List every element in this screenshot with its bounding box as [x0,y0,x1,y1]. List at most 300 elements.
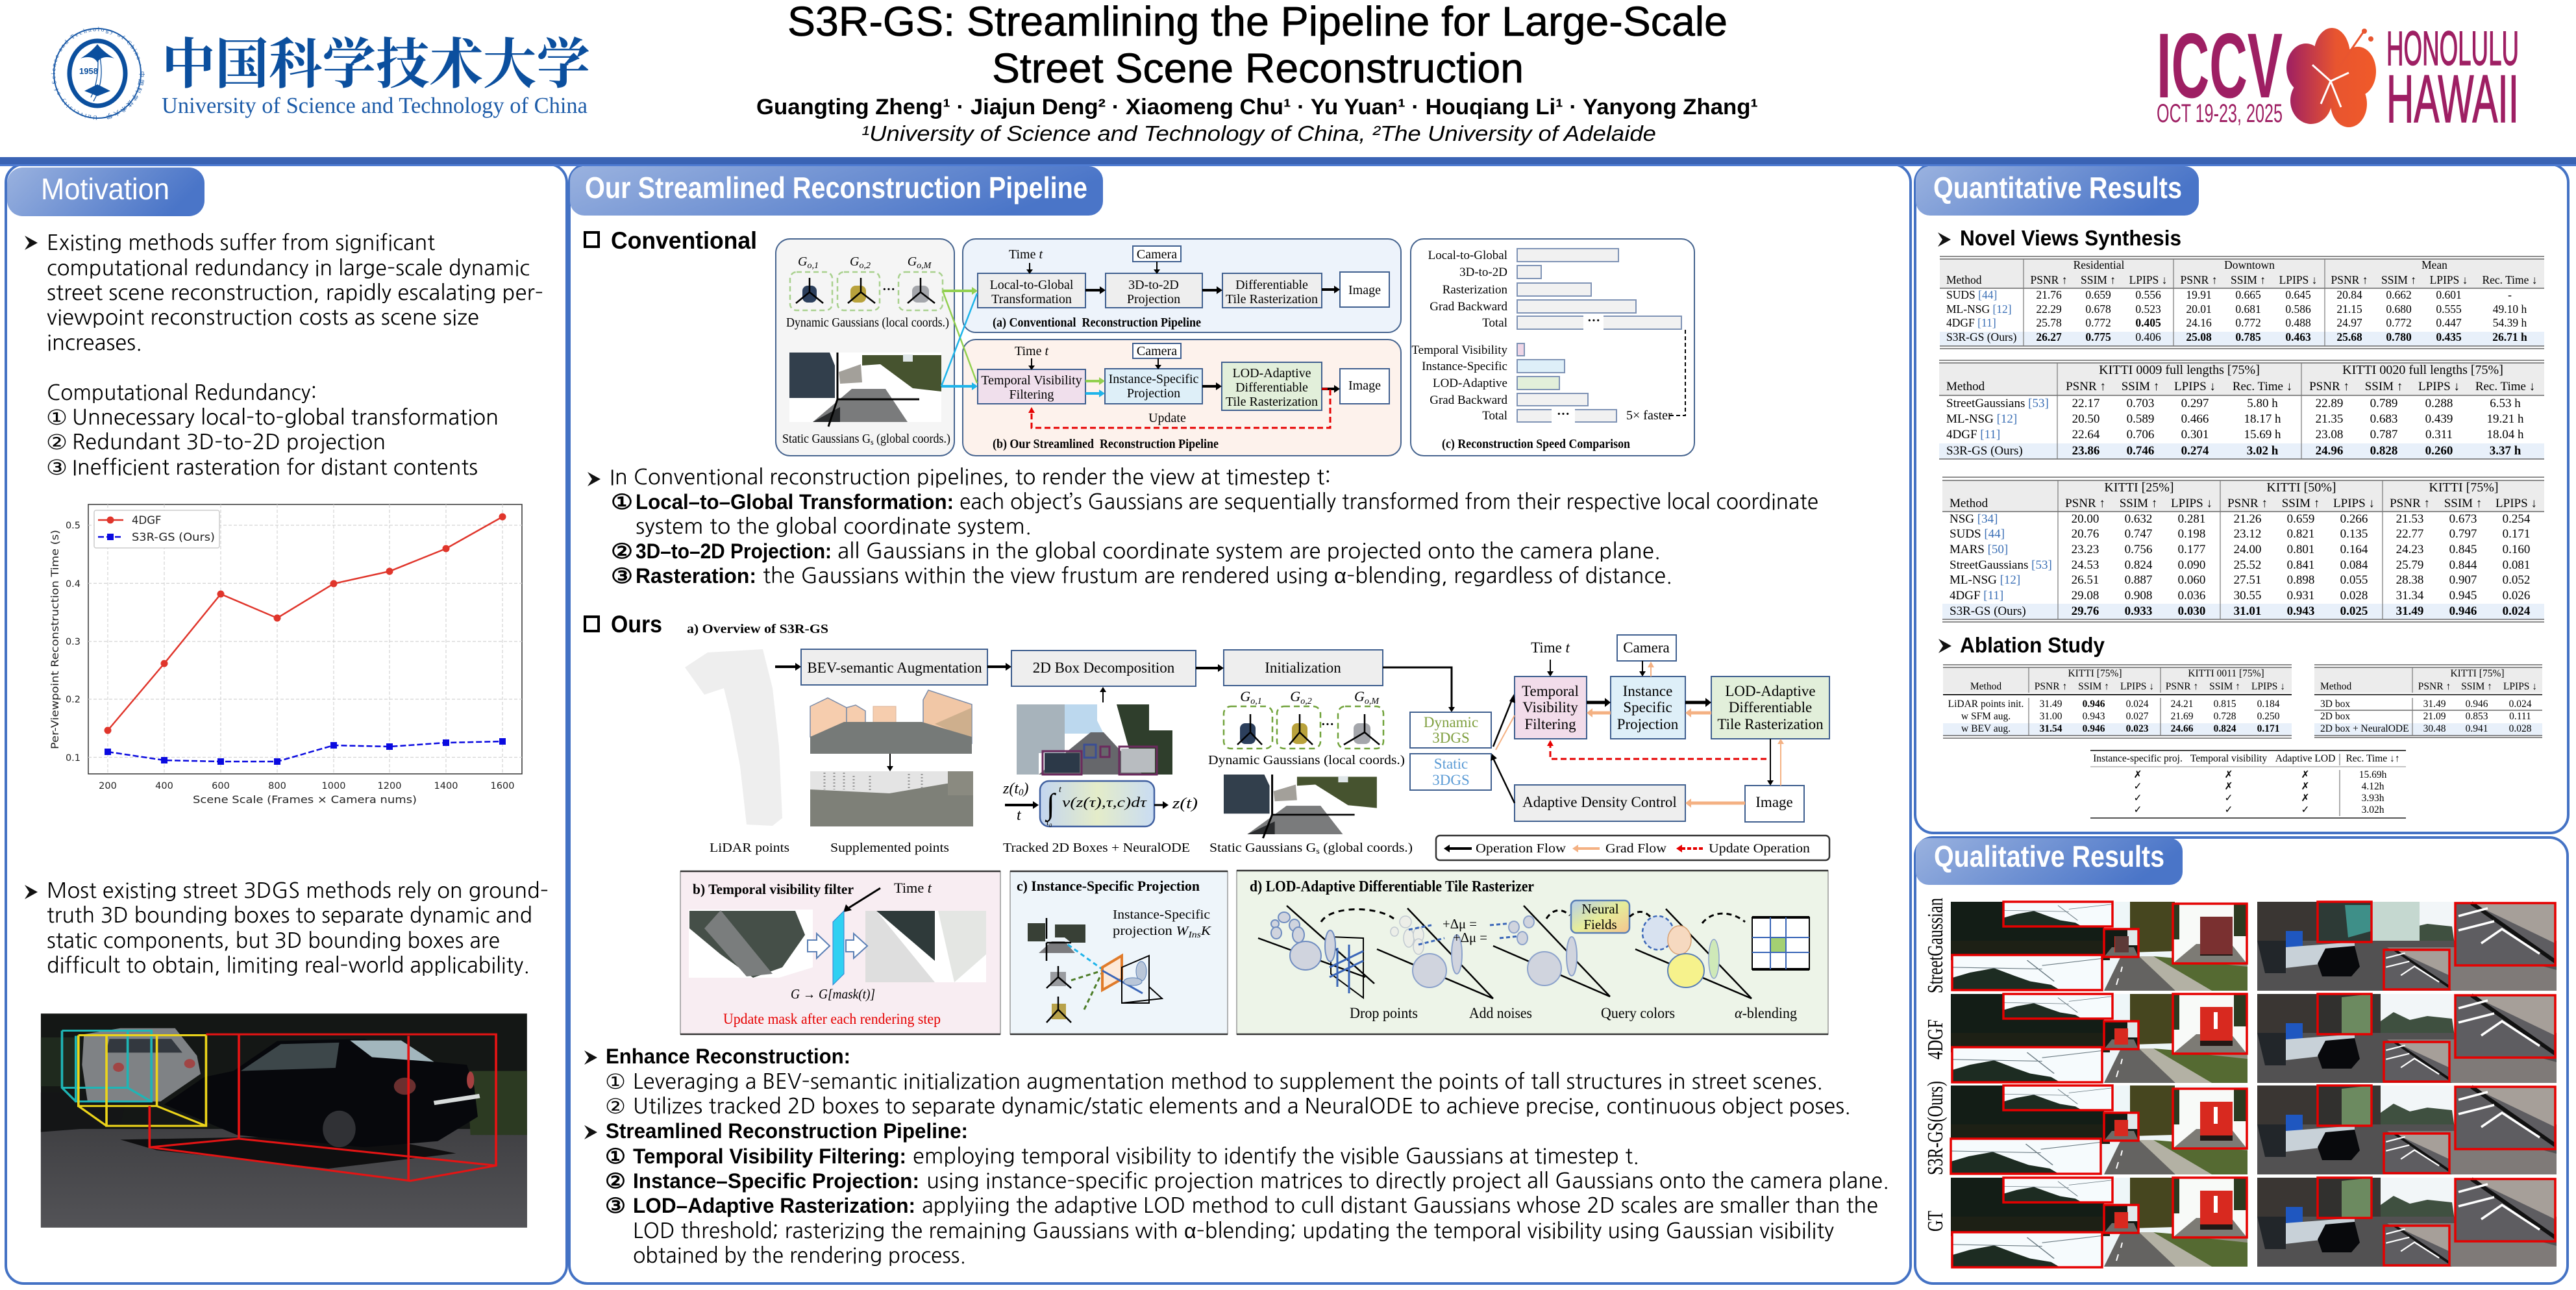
bounding box: teal [62,1031,151,1102]
text block: motivation first bullet: computational redundancy in large–scale dynamic [47,258,530,279]
table: ablation boxes: 31.49 [2423,699,2446,710]
chart axis labels: 1600 [491,781,514,791]
text block: streamlined pipeline: ① [605,1145,626,1168]
table: novel views residential downtown mean: 0.488 [2285,316,2311,329]
table: KITTI percentages: 25.52 [2234,558,2261,572]
dynamic gaussians group: o,2 [1300,697,1312,706]
table: ablation initialization: Method [1970,681,2001,692]
panel: b temporal visibility filter: Update mask after each rendering step [723,1011,941,1027]
panel: conventional pipeline: Camera [1137,247,1177,262]
table: KITTI full lengths: 0.274 [2181,444,2209,458]
table: KITTI percentages: 0.907 [2449,573,2477,587]
panel: gaussian inputs: o,1 [807,261,819,271]
table: KITTI percentages: 21.53 [2396,512,2423,526]
table: KITTI percentages: 0.084 [2340,558,2368,572]
table: KITTI full lengths: 23.08 [2316,428,2343,441]
table: novel views residential downtown mean: Downtown [2224,258,2275,271]
row: GT right [2257,1178,2557,1267]
table: novel views residential downtown mean: 49.10 h [2493,303,2527,316]
flow boxes top row: Initialization [1265,660,1341,676]
text block: enhance reconstruction: Enhance Reconstruction: [606,1045,850,1068]
heading: ablation study: Ablation Study [1960,633,2105,657]
text block: streamlined pipeline: using instance–specific projection matrices to directly project all Gaussians onto the camera plane. [926,1171,1889,1192]
table: KITTI percentages: 0.060 [2178,573,2205,587]
table: KITTI full lengths: 0.828 [2370,444,2397,458]
table: ablation initialization [1943,665,2292,738]
table: novel views residential downtown mean: PSNR ↑ [2031,273,2067,286]
table: KITTI percentages: 0.632 [2125,512,2152,526]
table: ablation boxes: 2D box [2320,711,2350,722]
table: KITTI full lengths: 0.301 [2181,428,2209,441]
pipeline boxes: Visibility [1522,699,1578,715]
table: ablation modules: Instance-specific proj. [2093,753,2183,764]
table: KITTI full lengths: 5.80 h [2247,397,2278,410]
icon: USTC seal: 1958 [79,66,98,76]
table: novel views residential downtown mean: 26.27 [2036,330,2062,343]
table: ablation boxes: 0.111 [2509,711,2531,722]
table: KITTI full lengths: 23.86 [2072,444,2099,458]
panel: gaussian inputs: (global coords.) [874,432,950,446]
table: ablation initialization: 0.027 [2126,711,2149,722]
chart axis labels: 600 [212,781,230,791]
logo: ICCV [2157,14,2519,137]
3DGS boxes: Static [1434,756,1468,772]
table: novel views residential downtown mean: PSNR ↑ [2331,273,2368,286]
logo: USTC university [51,21,590,119]
query colors step: Query colors [1601,1005,1675,1021]
static gaussians image [1224,775,1377,838]
table: ablation boxes: KITTI [75%] [2450,668,2505,679]
dynamic gaussians group: Dynamic Gaussians (local coords.) [1208,753,1405,767]
table: KITTI percentages: 0.756 [2125,543,2152,556]
table: KITTI percentages: 0.943 [2287,604,2314,618]
panel: gaussian inputs: o,2 [859,261,871,271]
chart axis labels [49,521,514,806]
pipeline boxes: Filtering [1524,716,1576,732]
table: novel views residential downtown mean: 54.39 h [2493,316,2527,329]
panel: reconstruction speed comparison: Total [1482,409,1507,423]
table: ablation initialization: 24.21 [2171,699,2193,710]
table: KITTI full lengths: 0.787 [2370,428,2397,441]
row: StreetGaussian left [1951,902,2248,991]
table: novel views residential downtown mean: 0.772 [2235,316,2261,329]
text block: enhance reconstruction [584,1045,1851,1117]
legend [1436,836,1829,860]
table: KITTI full lengths: StreetGaussians [53] [1946,397,2049,410]
text block: motivation first bullet: viewpoint reconstruction costs as scene size [47,307,479,328]
table: ablation boxes: 0.024 [2509,699,2532,710]
title: Street Scene Reconstruction [992,45,1524,92]
panel: conventional pipeline: Local-to-Global [990,278,1074,292]
table: KITTI percentages: 30.55 [2234,589,2261,602]
captions: (global coords.) [1320,841,1413,855]
table: KITTI percentages: 0.281 [2178,512,2205,526]
table: novel views residential downtown mean: 0.523 [2135,303,2161,316]
text block: streamlined pipeline: employing temporal visibility to identify the visible Gaussians at timestep t. [913,1146,1639,1167]
table: KITTI full lengths: LPIPS ↓ [2418,380,2460,393]
panel: conventional pipeline: Projection [1127,292,1180,306]
table: KITTI full lengths: KITTI 0020 full lengths [75%] [2342,363,2503,377]
text block: conventional description: In Conventional reconstruction pipelines, to render the view at timestep t: [610,467,1331,488]
text block: computational redundancy list: ③ [46,457,68,478]
pipeline boxes: Projection [1617,716,1679,732]
table: KITTI percentages: LPIPS ↓ [2496,497,2537,510]
table: KITTI percentages: 31.01 [2234,604,2261,618]
heading tab: quantitative [1916,166,2199,216]
panel: reconstruction speed comparison: 3D-to-2D [1459,266,1507,279]
captions: s [1316,846,1320,856]
NeuralODE block: z(t [1003,780,1019,797]
text block: streamlined pipeline: ③ [605,1194,626,1217]
table: ablation initialization: 31.00 [2040,711,2062,722]
panel: center pipeline border [569,164,1911,1284]
panel: b temporal visibility filter: G → G[mask(t)] [791,986,875,1002]
panel: qualitative results border [1915,837,2568,1284]
text block: streamlined pipeline: Temporal Visibility Filtering: [633,1145,906,1168]
table: novel views residential downtown mean: Mean [2421,258,2447,271]
table: ablation modules: ✗ [2301,792,2310,804]
panel: gaussian inputs: Static Gaussians G [782,432,880,446]
text block: computational redundancy list: Computational Redundancy: [47,382,317,403]
text block: streamlined pipeline: Streamlined Reconstruction Pipeline: [606,1119,968,1143]
table: KITTI full lengths: Method [1946,380,1985,393]
table: ablation modules: ✓ [2224,792,2233,804]
table: KITTI full lengths: 19.21 h [2486,412,2524,426]
table: novel views residential downtown mean: Method [1946,273,1982,286]
header bar [0,157,2576,166]
table: ablation initialization: 31.54 [2040,723,2062,734]
pipeline boxes: Differentiable [1729,699,1812,715]
row labels: qualitative methods: StreetGaussian [1924,898,1948,993]
text block: motivation first bullet [25,232,543,353]
text block: conventional description: ② [611,540,633,563]
panel: gaussian inputs: G [798,254,807,269]
series: S3R-GS [105,738,506,765]
table: KITTI full lengths: KITTI 0009 full lengths [75%] [2099,363,2260,377]
table: KITTI full lengths: 0.260 [2425,444,2453,458]
text block: enhance reconstruction: Leveraging a BEV–semantic initialization augmentation method to supplement the points of tall structures in street scenes. [633,1071,1823,1092]
drop points step [1258,906,1418,1021]
panel: streamlined pipeline [963,340,1401,456]
table: novel views residential downtown mean: 0.601 [2436,288,2462,301]
table: KITTI full lengths: 6.53 h [2490,397,2521,410]
text block: computational redundancy list: Redundant 3D–to–2D projection [72,432,386,453]
captions: LiDAR points [710,841,789,855]
panel: conventional pipeline: Time t [1009,247,1043,262]
table: KITTI percentages: 0.659 [2287,512,2314,526]
table: KITTI percentages: PSNR ↑ [2065,497,2105,510]
panel: streamlined pipeline: Filtering [1009,388,1054,402]
table: KITTI full lengths: 0.706 [2127,428,2154,441]
table: novel views residential downtown mean: 25.68 [2336,330,2362,343]
table: novel views residential downtown mean: SSIM ↑ [2381,273,2416,286]
table: KITTI full lengths: 18.04 h [2486,428,2524,441]
panel: reconstruction speed comparison: 5× faster [1626,408,1672,423]
table: KITTI full lengths [1939,360,2544,459]
panel: streamlined pipeline: Camera [1137,344,1177,358]
text block: conventional description: the Gaussians within the view frustum are rendered using α–blending, regardless of distance. [763,565,1672,586]
table: ablation boxes: 0.028 [2509,723,2532,734]
table: KITTI percentages: KITTI [75%] [2429,480,2499,495]
chart axis labels: 0.5 [66,521,80,531]
pipeline boxes: Specific [1623,699,1672,715]
add noises step: +Δμ = [1453,930,1487,945]
legend: Update Operation [1709,841,1810,856]
diagram: conventional vs streamlined pipeline [776,239,1694,456]
table: KITTI percentages: 0.026 [2503,589,2530,602]
table: ablation initialization: 0.171 [2257,723,2279,734]
line chart: per-viewpoint reconstruction time [49,504,522,806]
pipeline boxes [1515,635,1829,822]
table: novel views residential downtown mean: 21.15 [2336,303,2362,316]
table: KITTI percentages: 0.160 [2503,543,2530,556]
table: KITTI percentages: 25.79 [2396,558,2423,572]
table: KITTI full lengths: 0.297 [2181,397,2209,410]
table: KITTI percentages: S3R-GS (Ours) [1950,604,2026,618]
table: novel views residential downtown mean: SSIM ↑ [2081,273,2116,286]
photo: cars with 3D bounding boxes [41,1013,527,1228]
text block: conventional description: Rasteration: [636,564,756,588]
table: KITTI full lengths: 18.17 h [2244,412,2281,426]
image grid: street scene comparison right column [2257,902,2557,1267]
table: ablation initialization: PSNR ↑ [2035,681,2067,692]
flow boxes top row: 2D Box Decomposition [1033,660,1175,676]
panel: c instance-specific projection [1010,871,1228,1034]
pipeline boxes: Time t [1531,639,1570,656]
panel: reconstruction speed comparison: Total [1482,316,1507,330]
table: ablation initialization: 0.946 [2083,699,2105,710]
table: KITTI percentages: SUDS [44] [1950,527,2005,541]
text block: enhance reconstruction: Utilizes tracked 2D boxes to separate dynamic/static elements and a NeuralODE to achieve precise, continuous object poses. [633,1096,1851,1117]
panel: conventional pipeline [963,239,1401,332]
table: novel views residential downtown mean: 0.463 [2285,330,2311,343]
table: ablation modules: Temporal visibility [2190,753,2267,764]
chart axis labels: 1400 [434,781,458,791]
table: novel views residential downtown mean: 22.29 [2036,303,2062,316]
text block: conventional description: ③ [611,564,633,588]
title [787,0,1728,92]
table: KITTI percentages: 23.23 [2072,543,2099,556]
table: KITTI percentages: 0.164 [2340,543,2368,556]
image: LiDAR points [685,649,782,826]
panel: conventional pipeline: Image [1348,283,1381,297]
table: ablation modules: Adaptive LOD [2275,753,2335,764]
panel: streamlined pipeline: Time t [1015,344,1048,358]
panel: gaussian inputs: o,M [917,261,932,271]
table: KITTI percentages: 31.49 [2396,604,2423,618]
table: novel views residential downtown mean: SUDS [44] [1946,288,1997,301]
add noises step [1377,908,1532,1021]
panel: quantitative results border [1915,164,2568,833]
table: KITTI percentages: 0.198 [2178,527,2205,541]
text block: computational redundancy list: ① [46,407,68,428]
text block: streamlined pipeline: obtained by the rendering process. [633,1245,966,1266]
heading tab: Motivation [7,167,204,216]
table: KITTI percentages: 24.53 [2072,558,2099,572]
table: ablation modules: 3.93h [2362,793,2384,804]
dynamic gaussians group: G [1290,688,1300,704]
table: ablation boxes: 0.941 [2466,723,2488,734]
table: novel views residential downtown mean: 24.97 [2336,316,2362,329]
table: novel views residential downtown mean: LPIPS ↓ [2129,273,2167,286]
table: ablation initialization: 21.69 [2171,711,2194,722]
table: ablation boxes: 3D box [2320,699,2350,710]
panel: conventional pipeline: 3D-to-2D [1128,278,1179,292]
NeuralODE block: t [1017,807,1022,824]
text block: streamlined pipeline: LOD–Adaptive Rasterization: [633,1194,915,1217]
table: novel views residential downtown mean: 0.772 [2386,316,2412,329]
panel: reconstruction speed comparison: LOD-Adaptive [1433,377,1507,390]
panel: c instance-specific projection: Instance-Specific [1113,908,1210,922]
panel: gaussian inputs: ··· [882,282,895,297]
table: KITTI percentages: 0.845 [2449,543,2477,556]
chart legend: 4DGF [132,514,161,527]
table: ablation initialization: PSNR ↑ [2166,681,2198,692]
table: KITTI percentages: 0.025 [2340,604,2368,618]
panel: conventional pipeline: (a) Conventional Reconstruction Pipeline [993,316,1201,330]
panel: conventional pipeline: Transformation [991,292,1072,306]
image: supplemented points [810,771,973,826]
table: KITTI percentages: 20.00 [2072,512,2099,526]
table: KITTI percentages: 0.055 [2340,573,2368,587]
heading tab: pipeline [570,166,1103,216]
table: ablation initialization: 0.815 [2214,699,2236,710]
legend: Operation Flow [1476,841,1567,856]
table: ablation initialization: 24.66 [2171,723,2194,734]
table: KITTI full lengths: S3R-GS (Ours) [1946,444,2023,458]
panel: gaussian inputs: Dynamic Gaussians (local coords.) [786,316,949,330]
row: 4DGF right [2257,994,2557,1083]
panel: c instance-specific projection: projection W [1113,924,1187,938]
panel: reconstruction speed comparison: (c) Reconstruction Speed Comparison [1442,437,1630,451]
text block: motivation second bullet: static components, but 3D bounding boxes are [47,930,500,951]
text block: conventional description: ① [611,490,633,514]
table: KITTI percentages: 24.23 [2396,543,2423,556]
table: ablation initialization: 0.023 [2126,723,2149,734]
heading tab: quantitative: Quantitative Results [1933,171,2182,205]
table: novel views residential downtown mean: LPIPS ↓ [2430,273,2468,286]
table: KITTI percentages: 28.38 [2396,573,2423,587]
arrows: gaussians to pipelines [941,287,978,390]
add noises step: +Δμ = [1443,916,1477,932]
panel: reconstruction speed comparison: Temporal Visibility [1411,343,1507,357]
text block: enhance reconstruction: ② [605,1096,626,1117]
chart axis labels: 0.1 [66,753,80,763]
icon: USTC seal: University of Science and Technology of China · 中国科学技术大学 [51,27,145,119]
table: KITTI full lengths: 0.439 [2425,412,2453,426]
table: ablation initialization: 0.946 [2083,723,2105,734]
authors: Guangting Zheng¹ · Jiajun Deng² · Xiaomeng Chu¹ · Yu Yuan¹ · Houqiang Li¹ · Yanyong Zhang¹ [756,95,1758,119]
table: KITTI percentages: 0.945 [2449,589,2477,602]
row: 4DGF left [1951,994,2248,1083]
table: novel views residential downtown mean: Residential [2074,258,2125,271]
table: KITTI percentages: 0.898 [2287,573,2314,587]
table: KITTI percentages: 0.266 [2340,512,2368,526]
table: novel views residential downtown mean: 0.645 [2285,288,2311,301]
text block: computational redundancy list: Inefficient rasteration for distant contents [72,457,478,478]
row: GT left [1951,1178,2248,1267]
table: KITTI full lengths: 22.89 [2316,397,2343,410]
table: KITTI percentages: 0.052 [2503,573,2530,587]
flow boxes top row [801,649,1383,686]
table: novel views residential downtown mean: 0.680 [2386,303,2412,316]
table: KITTI full lengths: SSIM ↑ [2122,380,2159,393]
dynamic gaussians group [1208,688,1405,767]
text block: motivation second bullet [25,880,549,976]
blending step [1635,909,1809,1021]
table: KITTI percentages: SSIM ↑ [2444,497,2482,510]
chart axis labels: 800 [268,781,286,791]
table: KITTI percentages: 0.797 [2449,527,2477,541]
table: KITTI full lengths: 0.703 [2127,397,2154,410]
table: KITTI full lengths: PSNR ↑ [2066,380,2106,393]
NeuralODE block [1002,780,1198,828]
table: KITTI percentages: 0.747 [2125,527,2152,541]
table: ablation boxes: 0.946 [2466,699,2488,710]
dynamic gaussians group: o,1 [1250,697,1262,706]
arrows top row [775,663,1455,712]
table: ablation initialization: w BEV aug. [1961,723,2011,734]
table: KITTI full lengths: ML-NSG [12] [1946,412,2017,426]
panel: streamlined pipeline: Projection [1127,386,1180,401]
table: KITTI percentages: 0.177 [2178,543,2205,556]
text block: motivation second bullet: truth 3D bounding boxes to separate dynamic and [47,905,532,926]
panel: streamlined pipeline: Image [1348,378,1381,393]
table: KITTI percentages: 0.946 [2449,604,2477,618]
table: novel views residential downtown mean: 0.775 [2085,330,2111,343]
chart axis labels: 1000 [322,781,345,791]
table: novel views residential downtown mean: 0.406 [2135,330,2161,343]
table: ablation boxes: 2D box + NeuralODE [2320,723,2409,734]
table: ablation modules: ✗ [2301,769,2310,780]
table: novel views residential downtown mean: S3R-GS (Ours) [1946,330,2017,343]
logo English name: University of Science and Technology of China [162,93,588,118]
chart legend [94,510,219,548]
row labels: qualitative methods: GT [1924,1211,1948,1232]
chart axis labels: 0.3 [66,637,80,647]
table: KITTI percentages: 0.844 [2449,558,2477,572]
table: novel views residential downtown mean: 4DGF [11] [1946,316,1996,329]
text block: conventional description: all Gaussians in the global coordinate system are projected onto the camera plane. [837,541,1661,562]
query colors step [1490,900,1675,1021]
chart axis labels: Per-Viewpoint Reconstruction Time (s) [49,530,61,749]
row: StreetGaussian right [2257,902,2557,991]
table: KITTI percentages: SSIM ↑ [2282,497,2320,510]
table: KITTI percentages: 0.931 [2287,589,2314,602]
table: ablation boxes: PSNR ↑ [2418,681,2451,692]
table: KITTI percentages: LPIPS ↓ [2171,497,2212,510]
table: novel views residential downtown mean: - [2508,288,2512,301]
table: KITTI full lengths: SSIM ↑ [2365,380,2403,393]
table: KITTI percentages: KITTI [50%] [2266,480,2336,495]
NeuralODE block: v(z(τ),τ,c)dτ [1062,794,1147,810]
table: KITTI percentages: 0.673 [2449,512,2477,526]
table: ablation boxes: 0.853 [2466,711,2488,722]
chart axis labels: 0.4 [66,579,80,589]
text block: computational redundancy list [46,382,499,478]
text block: conventional description: each object’s Gaussians are sequentially transformed from their respective local coordinate [960,491,1818,513]
table: novel views residential downtown mean: 0.678 [2085,303,2111,316]
table: novel views residential downtown mean: 0.681 [2235,303,2261,316]
table: KITTI full lengths: LPIPS ↓ [2174,380,2216,393]
arrow: boxes up [1100,687,1106,702]
table: ablation modules: 3.02h [2362,804,2384,815]
text block: motivation second bullet: difficult to obtain, limiting real–world applicability. [47,955,530,976]
chart axis labels: 1200 [378,781,401,791]
table: ablation modules: ✓ [2301,804,2310,815]
table: KITTI full lengths: 22.17 [2072,397,2099,410]
table: KITTI percentages: 0.824 [2125,558,2153,572]
